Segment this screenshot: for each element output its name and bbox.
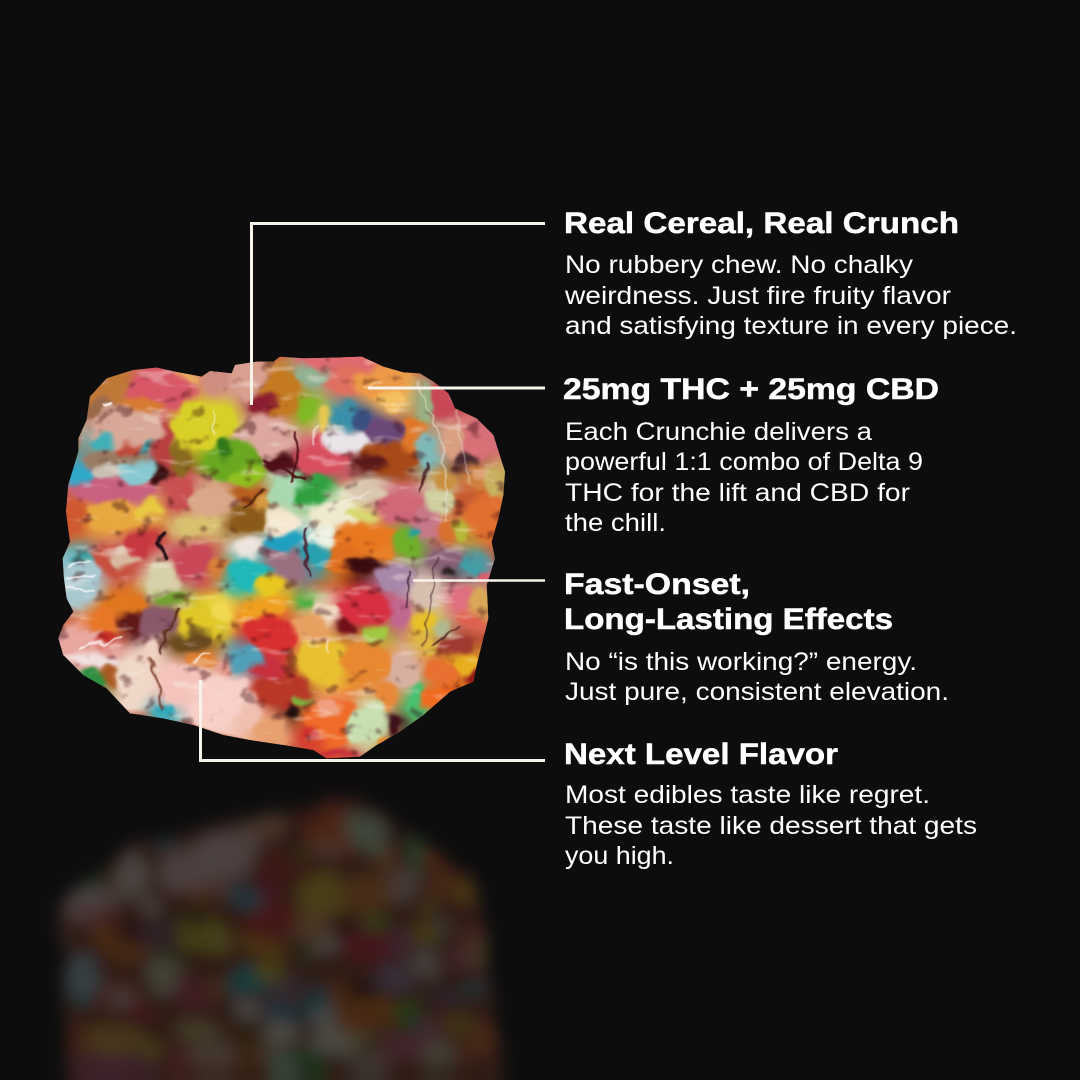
text block: fast-onset, long-lasting effects: Just pure, consistent elevation. [565, 678, 949, 706]
text block: 25mg THC + 25mg CBD: Each Crunchie delivers a [565, 418, 872, 446]
text block: 25mg THC + 25mg CBD [563, 373, 939, 537]
text block: next level flavor: Next Level Flavor [564, 738, 838, 771]
callout leader line: 25mg THC + 25mg CBD [368, 386, 545, 390]
text block: fast-onset, long-lasting effects: No “is this working?” energy. [565, 648, 917, 676]
text block: next level flavor: These taste like dessert that gets [565, 812, 977, 840]
text block: next level flavor: Most edibles taste like regret. [565, 781, 930, 809]
blurred reflection of the treat [58, 798, 504, 1078]
text block: real cereal, real crunch: weirdness. Just fire fruity flavor [564, 282, 951, 310]
marbled light streaks [63, 359, 499, 744]
text block: next level flavor [564, 738, 977, 870]
crevices and glossy highlights [67, 382, 470, 708]
text block: real cereal, real crunch [564, 207, 1017, 340]
callout leader line: next level flavor [200, 680, 545, 760]
text block: 25mg THC + 25mg CBD: powerful 1:1 combo of Delta 9 [565, 448, 923, 476]
text block: real cereal, real crunch: and satisfying texture in every piece. [565, 312, 1017, 340]
text block: 25mg THC + 25mg CBD: THC for the lift and CBD for [565, 479, 910, 507]
text block: 25mg THC + 25mg CBD: 25mg THC + 25mg CBD [563, 373, 939, 406]
text block: real cereal, real crunch: No rubbery chew. No chalky [565, 251, 914, 279]
text block: fast-onset, long-lasting effects [564, 568, 949, 706]
callout leader line: fast-onset [413, 579, 545, 582]
cereal treat photo illustration [58, 356, 505, 758]
dark crevice texture [58, 358, 504, 757]
text block: next level flavor: you high. [565, 842, 674, 870]
callout leader line: real cereal [252, 224, 545, 405]
text block: fast-onset, long-lasting effects: Fast-Onset, [564, 568, 750, 601]
text block: real cereal, real crunch: Real Cereal, Real Crunch [564, 207, 959, 240]
text block: fast-onset, long-lasting effects: Long-Lasting Effects [564, 603, 893, 636]
text block: 25mg THC + 25mg CBD: the chill. [565, 509, 666, 537]
